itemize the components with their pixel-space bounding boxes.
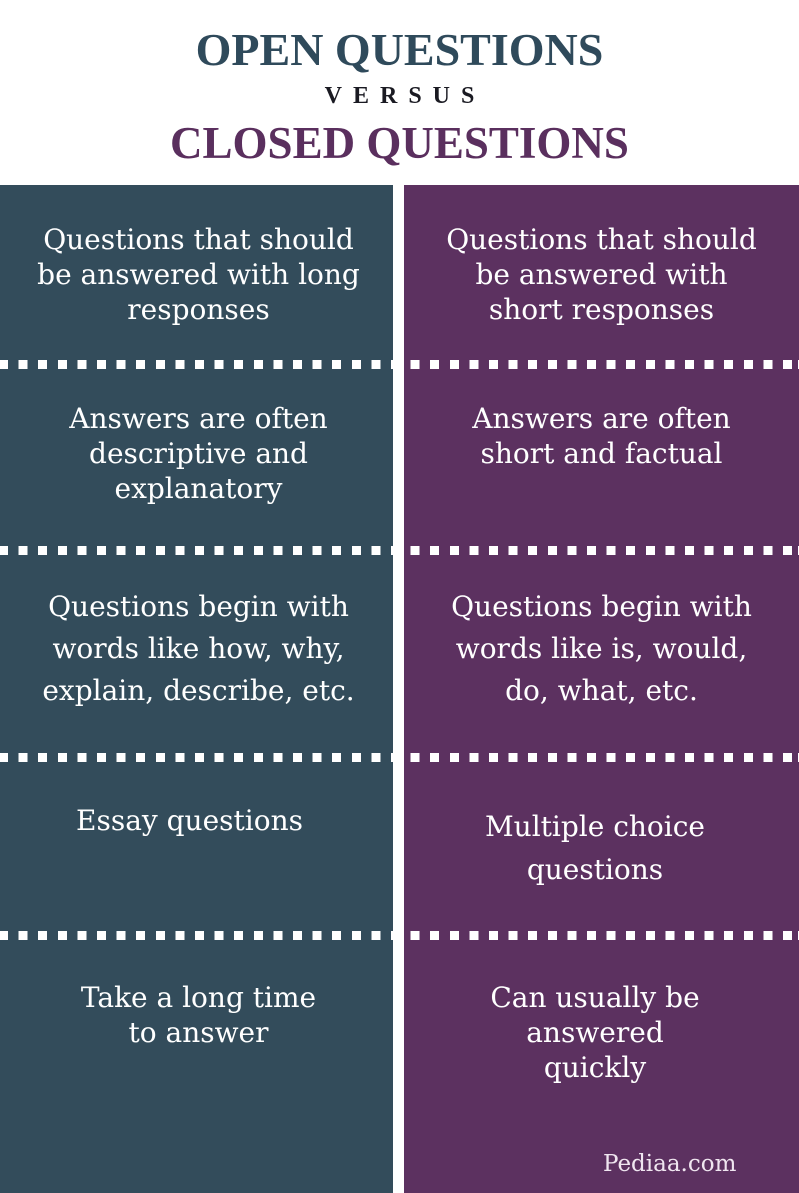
text: row5 right: answered: [526, 1016, 664, 1049]
text: row4 left: Essay questions: [76, 804, 303, 837]
text: row3 right: Questions begin with: [451, 590, 752, 623]
text: row1 left: responses: [127, 293, 270, 326]
text: row2 right: Answers are often: [472, 402, 731, 435]
text: row1 right: Questions that should: [446, 223, 757, 256]
text: row2 left: explanatory: [114, 472, 282, 505]
text: row2 left: Answers are often: [69, 402, 328, 435]
text: row3 left: words like how, why,: [52, 632, 345, 665]
text: row2 left: descriptive and: [89, 437, 308, 470]
panel: open questions: [0, 185, 393, 1193]
text: row5 right: [490, 981, 700, 1084]
text: row1 right: [446, 223, 757, 326]
text: row1 right: be answered with: [475, 258, 728, 291]
text: row5 left: Take a long time: [81, 981, 316, 1014]
text: row2 left: [69, 402, 328, 505]
text: row5 right: quickly: [544, 1051, 646, 1084]
title: closed questions: CLOSED QUESTIONS: [170, 118, 629, 168]
text: row1 left: Questions that should: [43, 223, 354, 256]
text: row5 left: to answer: [128, 1016, 269, 1049]
text: row2 right: [472, 402, 731, 470]
text: row2 right: short and factual: [480, 437, 723, 470]
panel: closed questions: [404, 185, 799, 1193]
text: row5 left: [81, 981, 316, 1049]
text: row3 left: explain, describe, etc.: [42, 674, 355, 707]
logo: pediaa.com: Pediaa.com: [603, 1151, 736, 1177]
text: row3 left: [42, 590, 355, 707]
title: open questions: OPEN QUESTIONS: [196, 24, 603, 75]
text: row4 right: [485, 810, 705, 886]
text: row4 right: Multiple choice: [485, 810, 705, 843]
text: row1 left: [37, 223, 360, 326]
text: row3 right: words like is, would,: [456, 632, 747, 665]
text: row3 left: Questions begin with: [48, 590, 349, 623]
title: versus: VERSUS: [325, 83, 485, 109]
text: row1 left: be answered with long: [37, 258, 360, 291]
text: row3 right: [451, 590, 752, 707]
text: row5 right: Can usually be: [490, 981, 700, 1014]
text: row1 right: short responses: [489, 293, 714, 326]
text: row4 right: questions: [527, 853, 663, 886]
text: row3 right: do, what, etc.: [505, 674, 698, 707]
